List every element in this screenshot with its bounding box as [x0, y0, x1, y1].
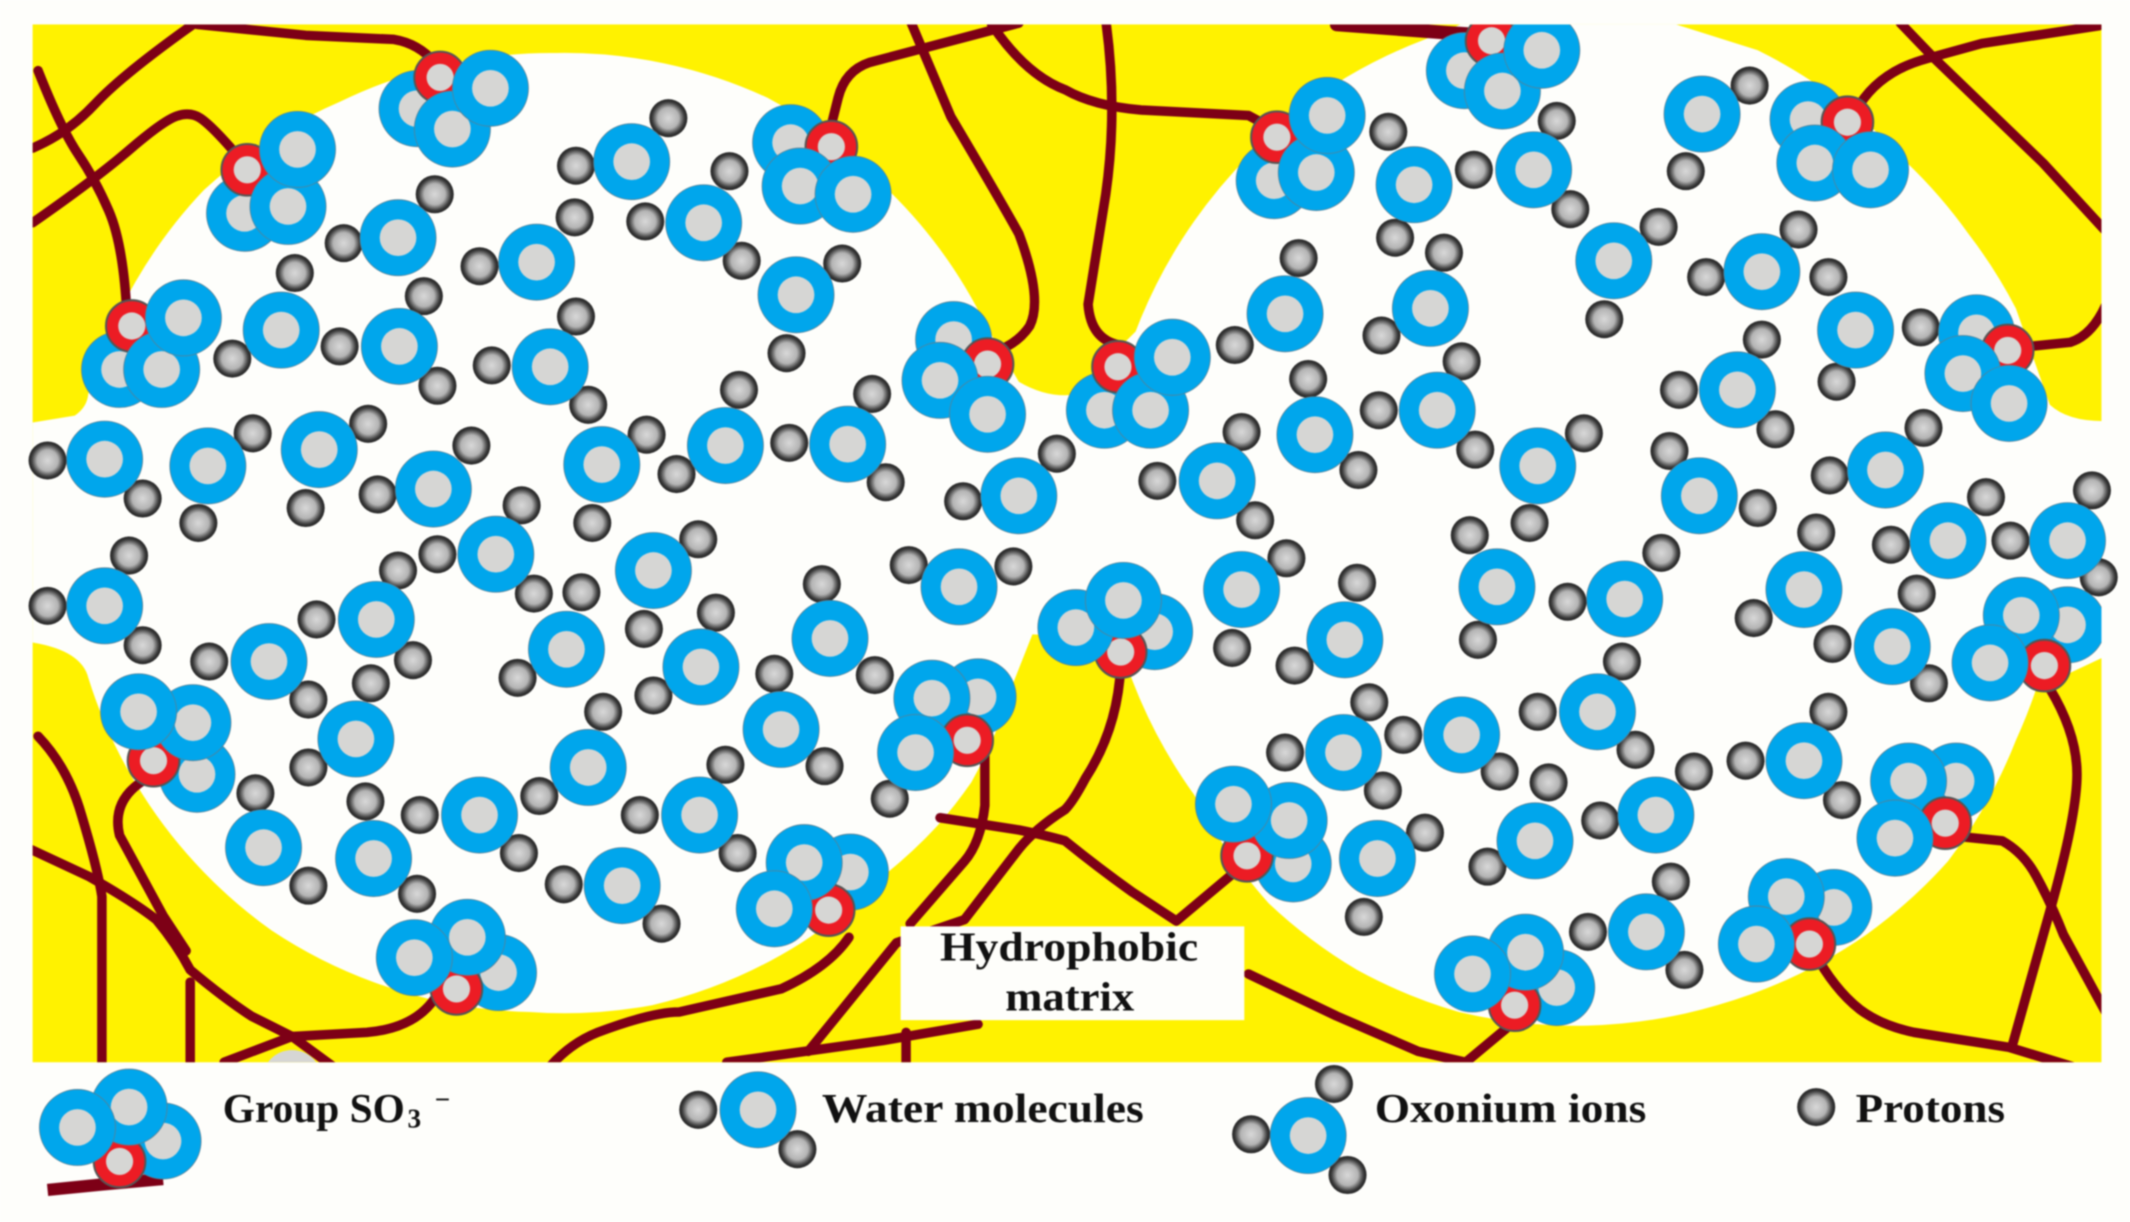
- water molecule: [1216, 239, 1323, 364]
- water molecule: [944, 435, 1076, 534]
- water molecule: [743, 655, 844, 785]
- water molecule: [1468, 763, 1573, 886]
- water molecule: [1204, 539, 1305, 667]
- SO3 group: [207, 111, 336, 251]
- water molecule: [1664, 67, 1769, 190]
- water molecule: [520, 693, 626, 815]
- label: hydrophobic matrix: [901, 924, 1244, 1020]
- water molecule: [1581, 753, 1713, 853]
- SO3 group: [1718, 858, 1872, 982]
- oxonium ion: [1360, 342, 1494, 469]
- water molecule: [226, 774, 327, 905]
- water molecule: [758, 245, 861, 372]
- water molecule: [289, 664, 394, 787]
- water molecule: [1369, 113, 1452, 257]
- oxonium ion: [321, 277, 456, 405]
- proton: [871, 780, 909, 818]
- water molecule: [1650, 432, 1777, 534]
- water molecule: [1549, 534, 1680, 637]
- water molecule: [1576, 208, 1678, 338]
- legend: oxonium ions: [1232, 1065, 1646, 1194]
- legend: SO3 group: 3: [408, 1103, 421, 1133]
- legend: water molecules: Water molecules: [822, 1086, 1144, 1131]
- legend: water molecules: [679, 1072, 1144, 1168]
- water molecule: [190, 623, 327, 719]
- water molecule: [1872, 478, 2005, 579]
- oxonium ion: [1138, 413, 1274, 539]
- SO3 groups with water shells: [82, 12, 2106, 1031]
- water molecule: [1276, 564, 1383, 685]
- oxonium ion: [1266, 683, 1402, 810]
- SO3 group: [753, 105, 891, 232]
- water molecule: [1362, 234, 1468, 355]
- SO3 group: [379, 50, 528, 167]
- water molecule: [1500, 414, 1603, 542]
- water molecule: [1735, 513, 1842, 637]
- SO3 group: [1066, 319, 1210, 448]
- water molecule: [1687, 211, 1818, 310]
- oxonium ion: [1991, 471, 2118, 596]
- water molecule: [557, 99, 687, 200]
- SO3 group: [1925, 295, 2047, 441]
- water molecule: [615, 520, 717, 648]
- SO3 group: [736, 825, 888, 947]
- oxonium ion: [461, 198, 594, 300]
- SO3 group: [1236, 77, 1365, 219]
- oxonium ion: [1455, 102, 1589, 228]
- water molecule: [281, 405, 387, 527]
- hydrophilic clusters and channel: [33, 24, 2103, 1026]
- oxonium ion: [1519, 643, 1655, 769]
- water molecule: [1809, 258, 1894, 401]
- label: hydrophobic matrix: matrix: [1005, 975, 1135, 1020]
- oxonium ion: [473, 297, 607, 424]
- oxonium ion: [298, 552, 432, 679]
- water molecule: [499, 573, 605, 697]
- SO3 group: [376, 899, 537, 1015]
- water molecule: [170, 414, 272, 542]
- legend: oxonium ions: Oxonium ions: [1375, 1086, 1646, 1131]
- SO3 group: [1857, 743, 1994, 876]
- oxonium ion: [29, 537, 162, 664]
- water molecule: [792, 565, 894, 694]
- oxonium ion: [1569, 863, 1703, 989]
- oxonium ion: [1727, 693, 1861, 819]
- water molecule: [359, 427, 490, 527]
- legend: protons: [1797, 1086, 2005, 1131]
- water molecule: [1277, 360, 1377, 489]
- water molecule: [890, 546, 1032, 625]
- oxonium ion: [325, 175, 454, 276]
- SO3 group: [1434, 914, 1595, 1031]
- water molecule: [545, 848, 681, 943]
- water molecule: [336, 782, 436, 913]
- legend: SO3 group: [39, 1069, 450, 1190]
- water molecule: [657, 371, 763, 493]
- label: hydrophobic matrix: Hydrophobic: [940, 924, 1198, 969]
- SO3 group: [1195, 766, 1331, 902]
- oxonium ion: [1660, 321, 1794, 448]
- water molecule: [1811, 409, 1943, 508]
- water molecule: [1339, 814, 1444, 936]
- water molecule: [1451, 516, 1535, 659]
- SO3 group: [902, 302, 1026, 452]
- water molecule: [213, 254, 319, 378]
- water molecule: [1384, 697, 1519, 791]
- proton: [1902, 308, 1940, 346]
- legend: SO3 group: Group SO: [223, 1086, 405, 1131]
- oxonium ion: [770, 375, 905, 501]
- oxonium ion: [621, 746, 757, 872]
- water molecule: [564, 416, 666, 542]
- SO3 group: [1038, 562, 1193, 678]
- SO3 group: [82, 280, 221, 408]
- legend: SO3 group: −: [435, 1084, 450, 1114]
- oxonium ion: [1813, 575, 1948, 702]
- legend: protons: Protons: [1856, 1086, 2005, 1131]
- oxonium ion: [626, 152, 761, 280]
- legend: [39, 1065, 2005, 1194]
- SO3 group: [1952, 577, 2106, 701]
- SO3 group: [101, 674, 235, 812]
- water molecule: [401, 777, 538, 872]
- SO3 group: [1770, 82, 1909, 208]
- SO3 group: [878, 659, 1016, 791]
- SO3 group: [1426, 12, 1580, 129]
- water molecule: [634, 594, 739, 715]
- water molecule: [29, 421, 162, 518]
- oxonium ion: [418, 486, 553, 613]
- water molecules and oxonium ions, right cluster: [1138, 67, 2118, 989]
- water molecules and oxonium ions, left cluster: [29, 99, 1076, 943]
